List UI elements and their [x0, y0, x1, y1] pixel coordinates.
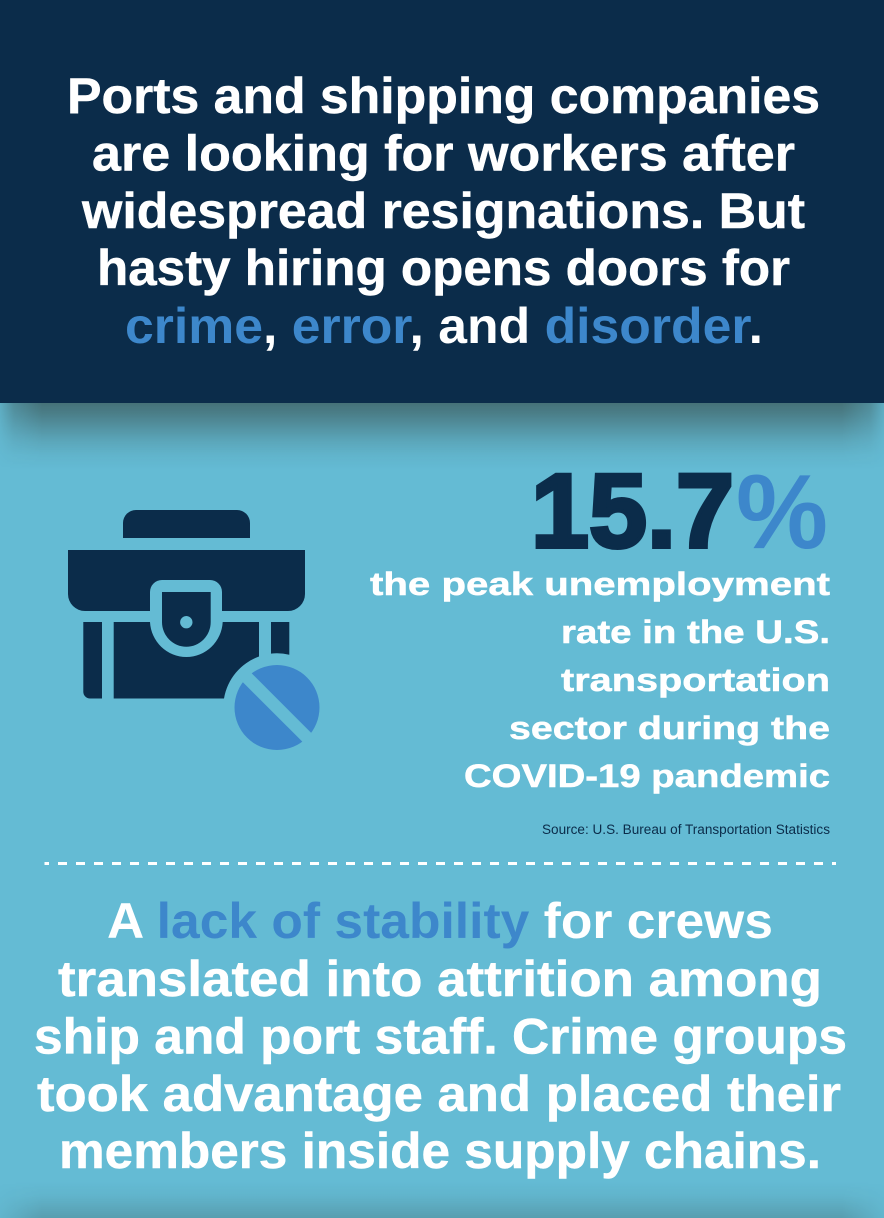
title	[67, 68, 820, 354]
text block: bottom statement: A lack of stability for crews	[107, 893, 773, 949]
statistic: 15.7%: %	[736, 453, 828, 571]
text block: bottom statement: members inside supply chains.	[59, 1123, 821, 1179]
text block: statistic description: transportation	[561, 662, 830, 698]
statistic: 15.7%: 15.7	[531, 453, 734, 570]
text block: statistic description: rate in the U.S.	[561, 614, 830, 650]
icon: briefcase with prohibition sign	[68, 510, 320, 750]
text block: statistic description: the peak unemployment	[370, 566, 830, 602]
text block: bottom statement: ship and port staff. Crime groups	[34, 1008, 847, 1064]
text block: statistic description: sector during the	[509, 710, 830, 746]
title: crime, error, and disorder.	[125, 298, 763, 354]
source note: Source: U.S. Bureau of Transportation Statistics	[542, 822, 830, 837]
text block: bottom statement	[34, 893, 847, 1179]
statistic: 15.7%	[531, 453, 828, 571]
text block: statistic description: COVID-19 pandemic	[464, 758, 830, 794]
panel: header background	[0, 0, 884, 403]
text block: bottom statement: took advantage and placed their	[37, 1066, 841, 1122]
title: widespread resignations. But	[81, 183, 805, 239]
title: Ports and shipping companies	[67, 68, 820, 124]
text block: bottom statement: translated into attrition among	[58, 951, 822, 1007]
title: hasty hiring opens doors for	[97, 240, 790, 296]
text block: statistic description	[370, 566, 830, 794]
title: are looking for workers after	[92, 126, 795, 182]
